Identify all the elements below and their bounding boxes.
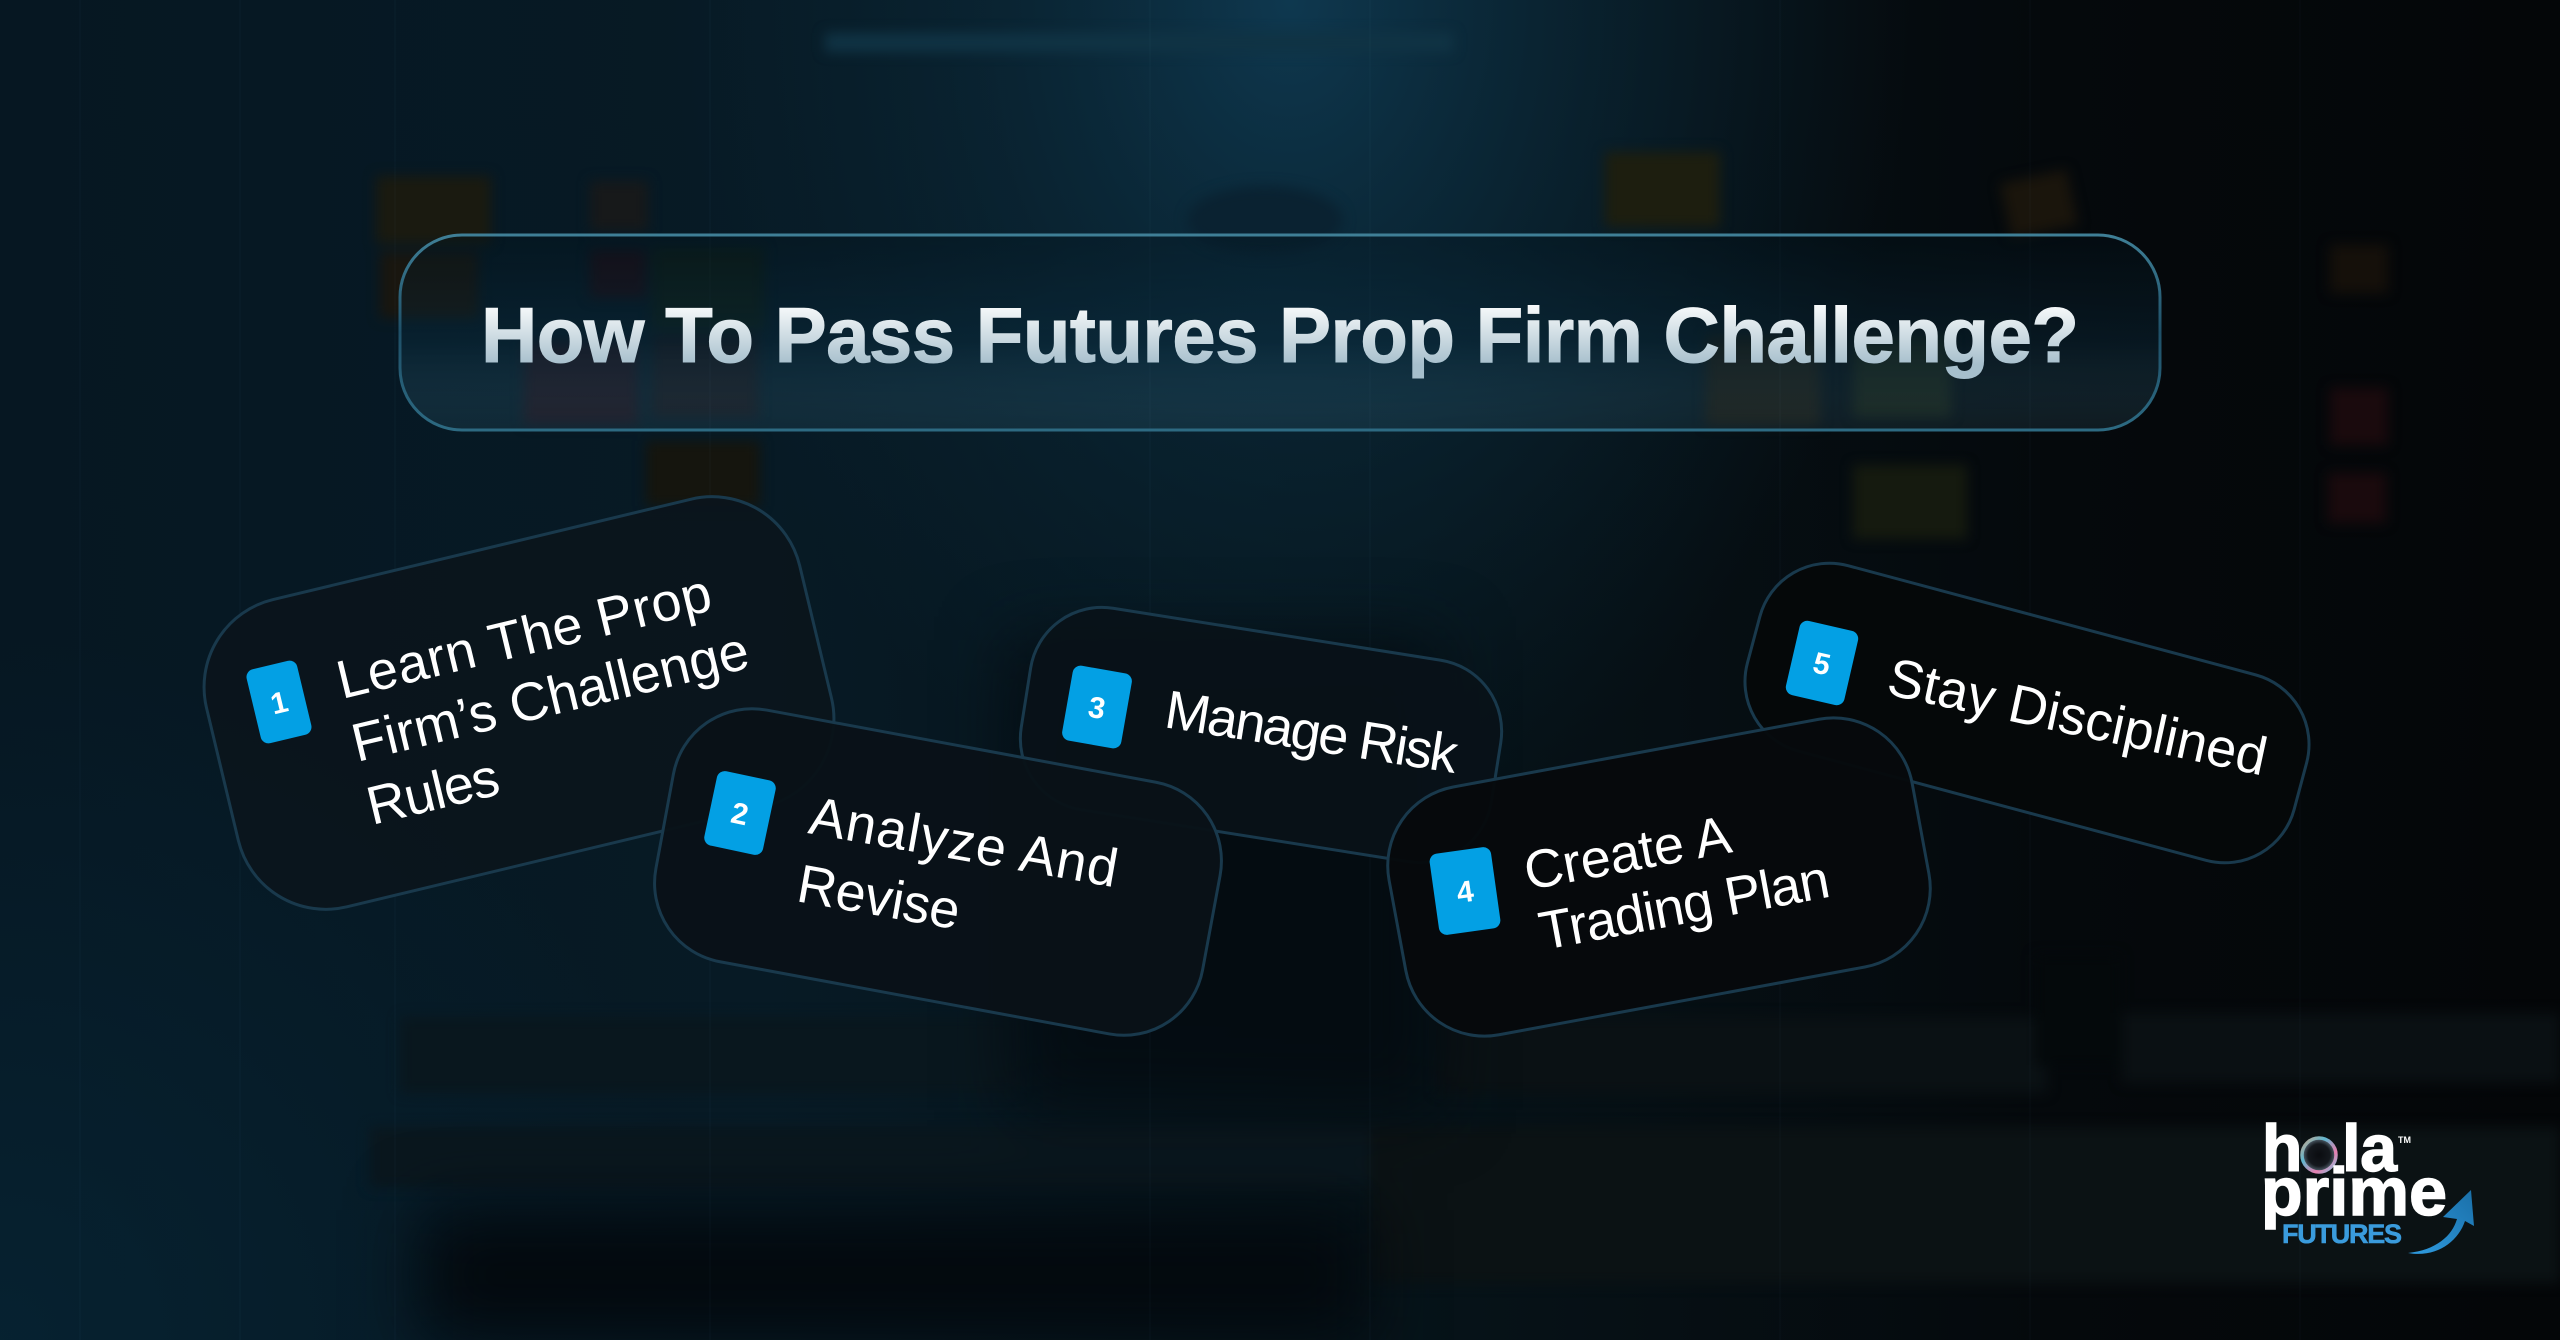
logo: hola prime futures: prime <box>2261 1154 2447 1230</box>
badge 5 <box>1784 619 1860 707</box>
card 1 label: Rules <box>361 747 505 837</box>
icon: bubble <box>2302 1138 2336 1172</box>
badge 1 <box>245 659 313 745</box>
card 1: learn the rules <box>186 478 852 928</box>
card 3: manage risk <box>1010 597 1512 873</box>
card 1 label: Firm’s Challenge <box>346 621 755 774</box>
card 4 label: Trading Plan <box>1534 849 1834 962</box>
card 5: stay disciplined <box>1729 547 2325 879</box>
badge 4: 4 <box>1455 875 1476 910</box>
logo: hola prime futures <box>2261 1111 2474 1254</box>
card 5 label: Stay Disciplined <box>1882 647 2272 787</box>
badge 2: 2 <box>728 797 751 832</box>
logo: hola prime futures: hola <box>2262 1111 2398 1185</box>
card 3 label: Manage Risk <box>1161 680 1463 785</box>
card 4 label: Create A <box>1519 805 1736 902</box>
badge 3 <box>1061 664 1133 750</box>
logo: hola prime futures: FUTURES <box>2282 1219 2402 1249</box>
card 1 label <box>331 563 755 837</box>
badge 1: 1 <box>267 685 291 721</box>
card 2 label: Revise <box>793 854 965 941</box>
badge 5: 5 <box>1810 647 1834 682</box>
icon: rising arrow <box>2408 1190 2474 1254</box>
card 2 label: Analyze And <box>805 786 1123 899</box>
trademark: TM <box>2398 1135 2411 1145</box>
title: How To Pass Futures Prop Firm Challenge? <box>481 291 2079 379</box>
card 1 label: Learn The Prop <box>331 563 717 711</box>
badge 2 <box>703 770 777 856</box>
title panel <box>400 235 2160 430</box>
badge 4 <box>1429 846 1501 936</box>
badge 3: 3 <box>1086 691 1108 726</box>
card 4 label <box>1519 805 1834 962</box>
card 4: create a trading plan <box>1374 705 1944 1049</box>
card 2: analyze and revise <box>641 695 1235 1049</box>
